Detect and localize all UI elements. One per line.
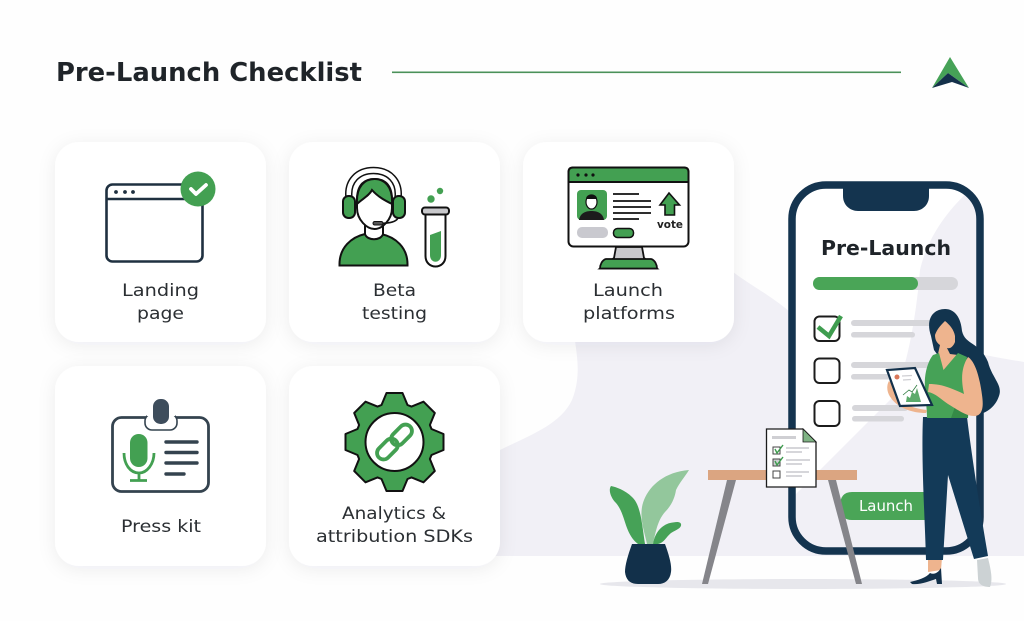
panel: launch platforms — [523, 142, 734, 342]
title: Pre-Launch Checklist — [56, 58, 362, 88]
label: analytics and attribution SDKs: Analytics & — [342, 504, 446, 524]
desk — [702, 470, 862, 584]
label: beta testing — [362, 281, 427, 324]
icon: tester with headset and test tube — [339, 170, 449, 266]
background blob — [480, 272, 1024, 556]
top — [925, 353, 968, 418]
arm — [928, 357, 983, 416]
left foot and shoe — [928, 558, 942, 572]
icon: press badge with microphone — [112, 399, 208, 492]
right shoe — [977, 558, 991, 587]
icon: monitor with vote page — [568, 168, 688, 268]
trousers — [922, 417, 988, 560]
label: landing page: page — [137, 304, 184, 324]
face and neck — [935, 321, 958, 372]
icon: gear with chain link — [346, 393, 444, 491]
launch button: Launch — [859, 497, 913, 515]
label: beta testing: Beta — [373, 281, 416, 301]
progress bar — [813, 277, 958, 290]
label: landing page — [122, 281, 199, 324]
phone notch — [843, 187, 929, 211]
label: analytics and attribution SDKs: attribution SDKs — [316, 527, 473, 547]
panel: analytics and attribution SDKs — [289, 366, 500, 566]
panel: beta testing — [289, 142, 500, 342]
ground shadow — [600, 579, 1006, 589]
far hand and forearm — [887, 381, 927, 413]
label: analytics and attribution SDKs — [316, 504, 473, 547]
checklist rows — [814, 316, 936, 426]
woman with tablet — [887, 309, 1000, 587]
launch button — [840, 492, 930, 520]
hair — [929, 309, 1000, 415]
phone heading: Pre-Launch — [821, 236, 951, 260]
label: launch platforms: Launch — [593, 281, 663, 301]
label: landing page: Landing — [122, 281, 199, 301]
panel: landing page — [55, 142, 266, 342]
panel: press kit — [55, 366, 266, 566]
label: launch platforms: platforms — [583, 304, 675, 324]
icon: monitor with vote page: vote — [657, 219, 683, 231]
potted plant — [610, 470, 689, 584]
icon: browser with check — [106, 172, 216, 262]
document on desk — [766, 429, 816, 487]
phone — [792, 185, 980, 551]
header line — [392, 72, 901, 73]
label: launch platforms — [583, 281, 675, 324]
label: beta testing: testing — [362, 304, 427, 324]
tablet — [887, 368, 932, 406]
logo — [932, 57, 969, 88]
label: press kit: Press kit — [121, 517, 201, 537]
